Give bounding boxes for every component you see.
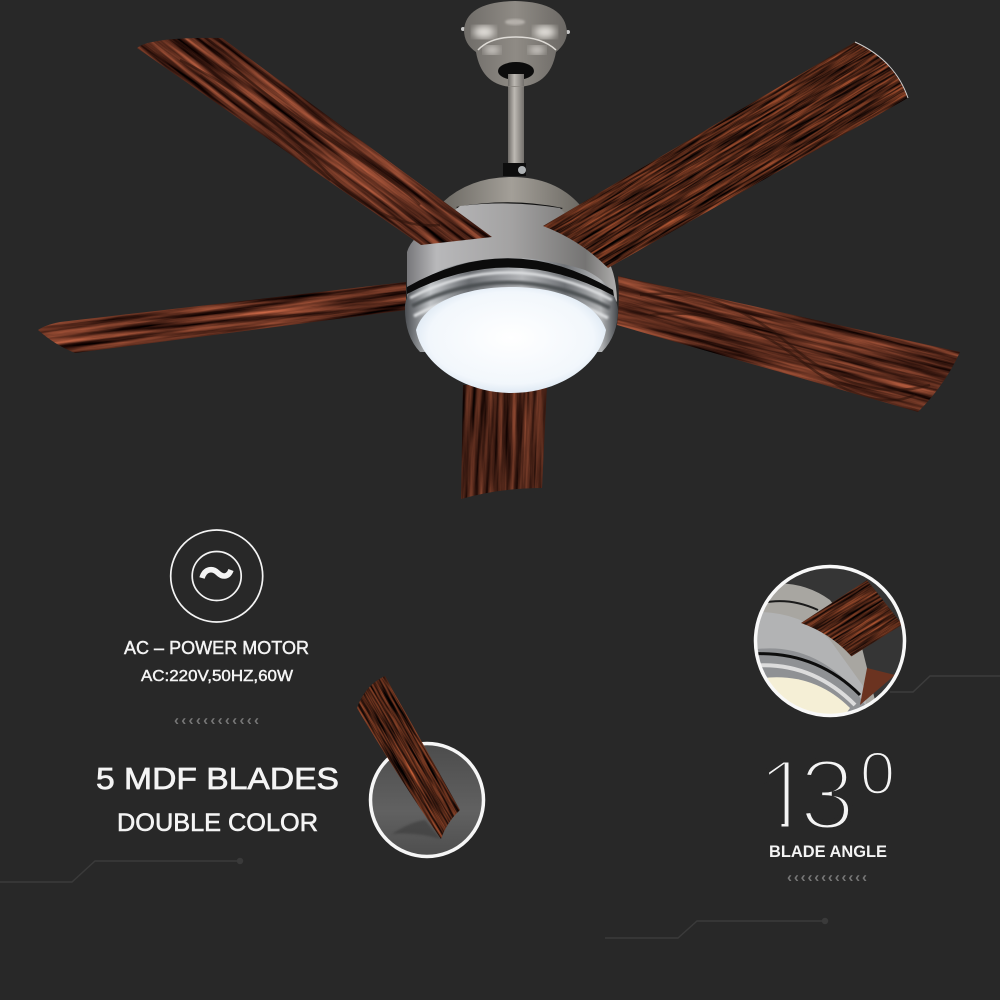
inset: blade sample <box>357 676 486 858</box>
label: blade angle: BLADE ANGLE <box>769 842 887 861</box>
fan illustration <box>38 1 960 499</box>
blade: top right <box>543 42 908 268</box>
circuit line: right <box>890 676 1000 692</box>
ceiling canopy <box>461 1 570 87</box>
blade: bottom <box>461 385 547 499</box>
blade: right <box>617 276 960 412</box>
text: AC specification: AC:220V,50HZ,60W <box>141 668 293 685</box>
inset: blade angle detail <box>754 564 906 718</box>
chevrons left: ‹‹‹‹‹‹‹‹‹‹‹‹ <box>174 712 259 729</box>
chevrons right: ‹‹‹‹‹‹‹‹‹‹‹‹ <box>787 869 867 886</box>
glass lamp shade <box>416 287 606 393</box>
motor housing <box>407 177 617 325</box>
blade: left <box>38 282 406 353</box>
blade: top left <box>137 38 492 245</box>
number: 13 degrees: 0 <box>860 740 895 807</box>
icon: AC power <box>171 530 263 622</box>
blade edge highlight <box>855 42 908 98</box>
heading: AC power motor: AC – POWER MOTOR <box>124 638 309 658</box>
downrod <box>503 73 526 176</box>
chrome ring <box>405 258 618 352</box>
heading: double color: DOUBLE COLOR <box>117 809 318 837</box>
circuit line: bottom left <box>0 858 242 882</box>
number: 13 degrees: 13 <box>757 739 855 851</box>
circuit line: bottom right <box>605 918 828 938</box>
heading: 5 MDF blades: 5 MDF BLADES <box>96 761 339 796</box>
